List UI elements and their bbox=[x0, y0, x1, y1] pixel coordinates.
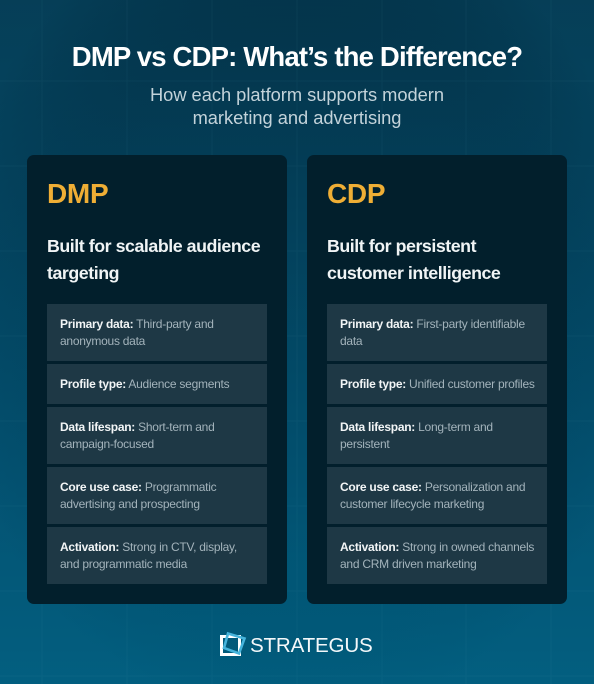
DMP subheading bbox=[47, 236, 260, 282]
row: activation: and CRM driven marketing bbox=[340, 557, 476, 571]
row: activation bbox=[47, 527, 267, 584]
row: activation: and programmatic media bbox=[60, 557, 187, 571]
panel: DMP bbox=[27, 155, 287, 604]
row: primary data: Primary data: Third-party and bbox=[60, 317, 214, 331]
row: profile type: Profile type: Unified customer profiles bbox=[340, 377, 535, 391]
row: data lifespan: Data lifespan: Long-term and bbox=[340, 420, 493, 434]
wordmark: STRATEGUS bbox=[250, 634, 373, 657]
CDP heading: CDP bbox=[327, 178, 385, 209]
row: core use case: Core use case: Programmatic bbox=[60, 480, 216, 494]
DMP subheading: targeting bbox=[47, 262, 119, 282]
row: data lifespan: Data lifespan: Short-term and bbox=[60, 420, 215, 434]
row: profile type bbox=[47, 364, 267, 404]
row: primary data: data bbox=[340, 334, 362, 348]
row: activation: Activation: Strong in CTV, display, bbox=[60, 540, 237, 554]
row: activation: Activation: Strong in owned channels bbox=[340, 540, 534, 554]
row: primary data bbox=[47, 304, 267, 361]
subtitle bbox=[150, 84, 444, 128]
row: profile type bbox=[327, 364, 547, 404]
DMP heading: DMP bbox=[47, 178, 108, 209]
row: core use case: advertising and prospecting bbox=[60, 497, 200, 511]
row: primary data bbox=[327, 304, 547, 361]
subtitle: marketing and advertising bbox=[193, 107, 401, 128]
row: core use case: customer lifecycle marketing bbox=[340, 497, 484, 511]
row: profile type: Profile type: Audience segments bbox=[60, 377, 229, 391]
row: core use case bbox=[327, 467, 547, 524]
icon: overlapping squares bbox=[220, 632, 246, 656]
row: data lifespan bbox=[327, 407, 547, 464]
logo: Strategus bbox=[220, 632, 373, 657]
CDP subheading bbox=[327, 236, 500, 282]
row: activation bbox=[327, 527, 547, 584]
panel: CDP bbox=[307, 155, 567, 604]
row: core use case bbox=[47, 467, 267, 524]
CDP subheading: customer intelligence bbox=[327, 262, 500, 282]
row: core use case: Core use case: Personalization and bbox=[340, 480, 525, 494]
row: primary data: anonymous data bbox=[60, 334, 145, 348]
DMP subheading: Built for scalable audience bbox=[47, 236, 260, 256]
subtitle: How each platform supports modern bbox=[150, 84, 444, 105]
row: data lifespan bbox=[47, 407, 267, 464]
CDP subheading: Built for persistent bbox=[327, 236, 476, 256]
row: data lifespan: campaign-focused bbox=[60, 437, 154, 451]
row: primary data: Primary data: First-party identifiable bbox=[340, 317, 525, 331]
row: data lifespan: persistent bbox=[340, 437, 389, 451]
title: DMP vs CDP: What’s the Difference? bbox=[72, 41, 522, 72]
